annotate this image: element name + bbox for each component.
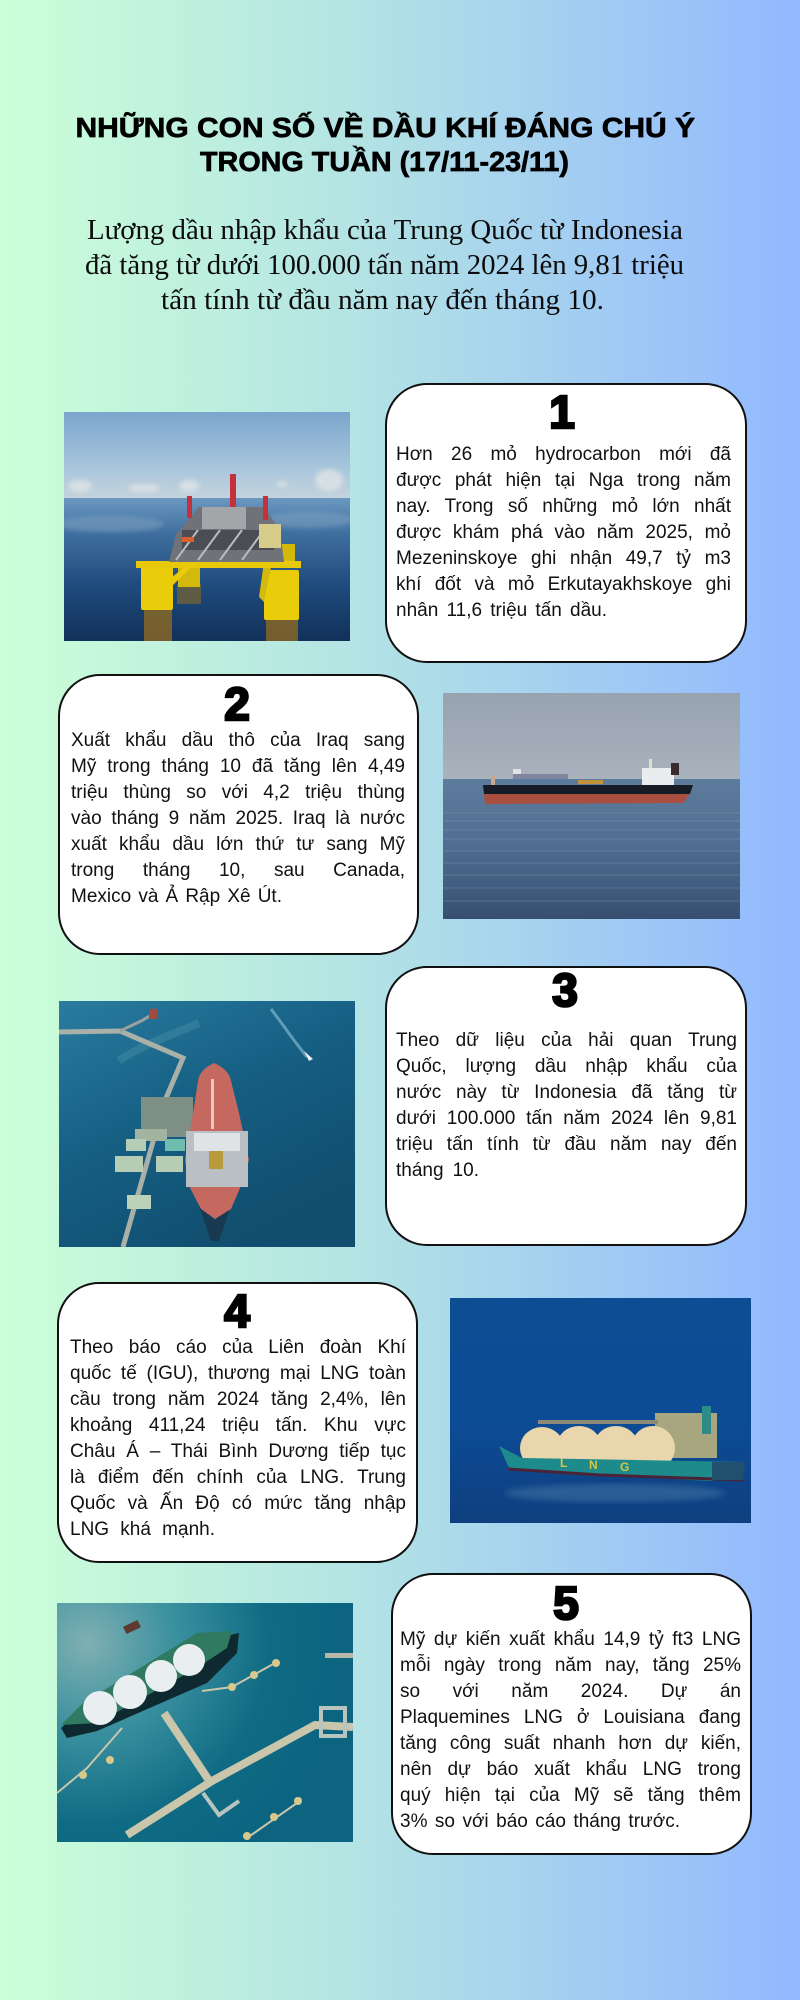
subtitle	[85, 215, 684, 316]
card 5 text: nên dự báo xuất khẩu LNG trong	[400, 1759, 741, 1780]
card 4 text	[70, 1337, 406, 1540]
number 3: 3	[552, 964, 578, 1016]
card 3 text: Quốc, lượng dầu nhập khẩu của	[396, 1056, 737, 1077]
photo: offshore oil platform	[64, 412, 350, 641]
card 1 text: nhân 11,6 triệu tấn dầu.	[396, 600, 607, 621]
number 1: 1	[549, 386, 575, 438]
card 3 text: triệu tấn tính từ đầu năm nay đến	[396, 1134, 737, 1155]
card 3 text: Theo dữ liệu của hải quan Trung	[396, 1030, 737, 1051]
card 1	[385, 383, 747, 663]
card 3 text: nước này từ Indonesia đã tăng từ	[396, 1082, 737, 1103]
card 1 text: khí đốt và mỏ Erkutayakhskoye ghi	[396, 574, 731, 595]
card 1 text	[396, 444, 731, 621]
card 5 text: so với năm 2024. Dự án	[400, 1681, 741, 1702]
card 4 text: quốc tế (IGU), thương mại LNG toàn	[70, 1363, 406, 1384]
card 4 text: Quốc và Ấn Độ có mức tăng nhập	[70, 1493, 406, 1514]
card 5	[391, 1573, 752, 1855]
subtitle: tấn tính từ đầu năm nay đến tháng 10.	[161, 285, 604, 316]
card 3 text: dưới 100.000 tấn năm 2024 lên 9,81	[396, 1108, 737, 1129]
card 1 text: Mezeninskoye ghi nhận 49,7 tỷ m3	[396, 548, 731, 569]
photo: LNG carrier	[450, 1298, 751, 1523]
card 1 text: Hơn 26 mỏ hydrocarbon mới đã	[396, 444, 731, 465]
card 5 text: mỗi ngày trong năm nay, tăng 25%	[400, 1655, 741, 1676]
card 5 text: Mỹ dự kiến xuất khẩu 14,9 tỷ ft3 LNG	[400, 1629, 741, 1650]
card 2 text: vào tháng 9 năm 2025. Iraq là nước	[71, 808, 405, 829]
title: TRONG TUẦN (17/11-23/11)	[200, 146, 569, 177]
photo: LNG carrier: N	[589, 1458, 598, 1472]
card 4 text: Theo báo cáo của Liên đoàn Khí	[70, 1337, 406, 1358]
card 2 text: xuất khẩu dầu lớn thứ tư sang Mỹ	[71, 834, 405, 855]
number 5: 5	[553, 1577, 579, 1629]
card 1 text: nay. Trong số những mỏ lớn nhất	[396, 496, 731, 517]
card 1 text: được khám phá vào năm 2025, mỏ	[396, 522, 731, 543]
card 2	[58, 674, 419, 955]
card 5 text	[400, 1629, 741, 1832]
number 2: 2	[224, 678, 250, 730]
photo: LNG tanker terminal from above	[57, 1603, 353, 1842]
card 5 text: Plaquemines LNG ở Louisiana đang	[400, 1707, 741, 1728]
card 1 text: được phát hiện tại Nga trong năm	[396, 470, 731, 491]
card 4 text: cầu trong năm 2024 tăng 2,4%, lên	[70, 1389, 406, 1410]
card 2 text	[71, 730, 405, 907]
card 4 text: khoảng 411,24 triệu tấn. Khu vực	[70, 1415, 406, 1436]
card 4 text: LNG khá mạnh.	[70, 1519, 215, 1540]
card 2 text: Mỹ trong tháng 10 đã tăng lên 4,49	[71, 756, 405, 777]
card 2 text: Mexico và Ả Rập Xê Út.	[71, 886, 282, 907]
card 5 text: quý hiện tại của Mỹ sẽ tăng thêm	[400, 1785, 741, 1806]
photo: oil tanker at sea	[443, 693, 740, 919]
card 2 text: triệu thùng so với 4,2 triệu thùng	[71, 782, 405, 803]
subtitle: đã tăng từ dưới 100.000 tấn năm 2024 lên 9,81 triệu	[85, 250, 684, 281]
card 4 text: Châu Á – Thái Bình Dương tiếp tục	[70, 1441, 406, 1462]
subtitle: Lượng dầu nhập khẩu của Trung Quốc từ Indonesia	[87, 215, 683, 246]
photo: LNG carrier: G	[620, 1460, 629, 1474]
card 5 text: 3% so với báo cáo tháng trước.	[400, 1811, 680, 1832]
photo: tanker at jetty	[59, 1001, 355, 1247]
card 3 text: tháng 10.	[396, 1160, 479, 1181]
card 3 text	[396, 1030, 737, 1181]
card 4	[57, 1282, 418, 1563]
card 5 text: tăng công suất nhanh hơn dự kiến,	[400, 1733, 741, 1754]
title	[76, 111, 696, 178]
photo: LNG carrier: L	[560, 1456, 567, 1470]
card 3	[385, 964, 747, 1246]
card 2 text: trong tháng 10, sau Canada,	[71, 860, 405, 881]
card 4 text: là điểm đến chính của LNG. Trung	[70, 1467, 406, 1488]
card 2 text: Xuất khẩu dầu thô của Iraq sang	[71, 730, 405, 751]
number 4: 4	[224, 1285, 250, 1337]
title: NHỮNG CON SỐ VỀ DẦU KHÍ ĐÁNG CHÚ Ý	[76, 111, 695, 143]
